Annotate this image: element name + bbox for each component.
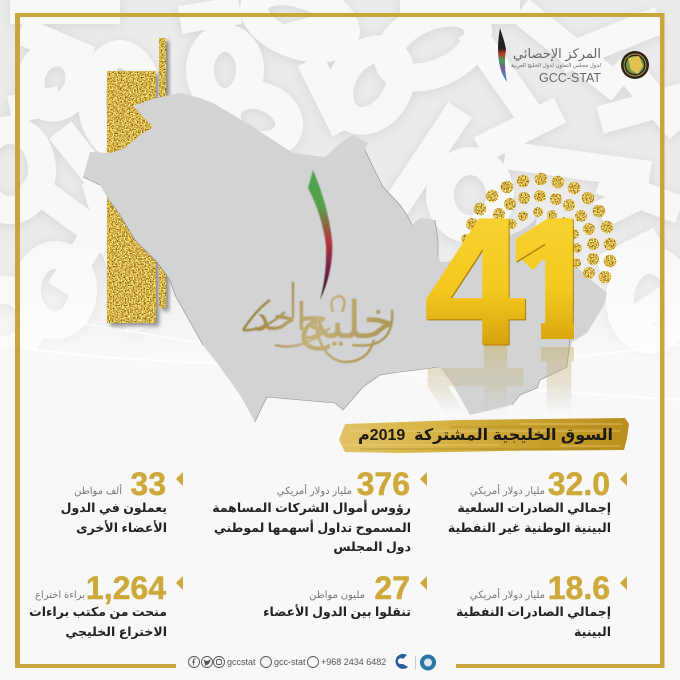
description: المسموح تداول أسهمها لموطني [214,520,411,534]
unit: مليار دولار أمريكي [470,590,545,601]
footer contacts [227,657,386,667]
logo arabic subtitle: لدول مجلس التعاون لدول الخليج العربية [511,63,601,69]
stat: 32.0 [448,466,627,536]
description [448,501,611,536]
description [61,501,167,536]
gold glitter map panels [107,38,169,326]
value: 18.6 [548,570,610,606]
number 41 reflection [428,346,574,406]
description: الاختراع الخليجي [65,624,167,638]
description [456,605,611,638]
white sweep lines [20,313,680,400]
arrow [176,472,183,486]
arc of gold dots [461,173,616,283]
number 41 in gold: 1 [506,182,606,382]
GCC emblem [621,51,649,79]
unit: ألف مواطن [74,486,122,497]
description: دول المجلس [333,540,411,554]
handle: gccstat [227,657,256,667]
stat: 27 [263,570,427,620]
description: الأعضاء الأخرى [76,520,167,534]
arrow [176,576,183,590]
banner title: السوق الخليجية المشتركة 2019م [358,427,613,444]
unit: مليون مواطن [309,590,365,601]
map of the Arabian Peninsula [83,93,607,422]
coastline detail [83,150,570,422]
description: يعملون في الدول [61,501,167,515]
number 41 reflection: 4 [425,305,525,505]
linkedin: gcc-stat [274,657,306,667]
stat: 1,264 [29,570,183,640]
unit: مليار دولار أمريكي [277,486,352,497]
description [212,500,411,554]
logo arabic name: المركز الإحصائي [513,46,601,61]
logo english name: GCC-STAT [539,71,601,85]
description: البينية الوطنية غير النفطية [448,520,611,534]
arrow [620,472,627,486]
value: 27 [374,570,410,606]
description: منحت من مكتب براءات [29,605,167,619]
value: 33 [130,466,166,502]
number 41 in gold: 4 [425,181,525,381]
background: pale letter pattern [0,0,680,326]
number 41 in gold [426,218,574,346]
value: 32.0 [548,466,610,502]
arrow [420,576,427,590]
calligraphy logo: one Gulf: واحد [253,295,325,340]
GCC-STAT ribbon icon [498,28,507,82]
footer emblems [396,654,436,670]
stat: 33 [61,466,183,536]
calligraphy logo: one Gulf: خليج [296,291,395,351]
stat: 18.6 [456,570,627,638]
arrow [620,576,627,590]
value: 1,264 [86,570,166,606]
description: البينية [574,624,611,638]
unit: براءة اختراع [35,590,85,601]
description: رؤوس أموال الشركات المساهمة [212,501,411,515]
description [29,605,167,640]
stat: 376 [212,466,427,554]
value: 376 [357,466,410,502]
description: تنقلوا بين الدول الأعضاء [263,605,411,619]
description: إجمالي الصادرات السلعية [457,501,611,515]
footer social icons [188,656,318,668]
number 41 in gold: 4 [426,182,526,382]
arrow [420,472,427,486]
phone: +968 2434 6482 [321,657,386,667]
description: إجمالي الصادرات النفطية [456,605,611,619]
gold brush banner [339,418,629,453]
logo text: GCC-STAT [511,46,601,85]
number 41 in gold: 1 [505,181,605,381]
number 41 reflection: 1 [505,305,605,505]
unit: مليار دولار أمريكي [470,486,545,497]
calligraphy logo: one Gulf [243,170,395,362]
